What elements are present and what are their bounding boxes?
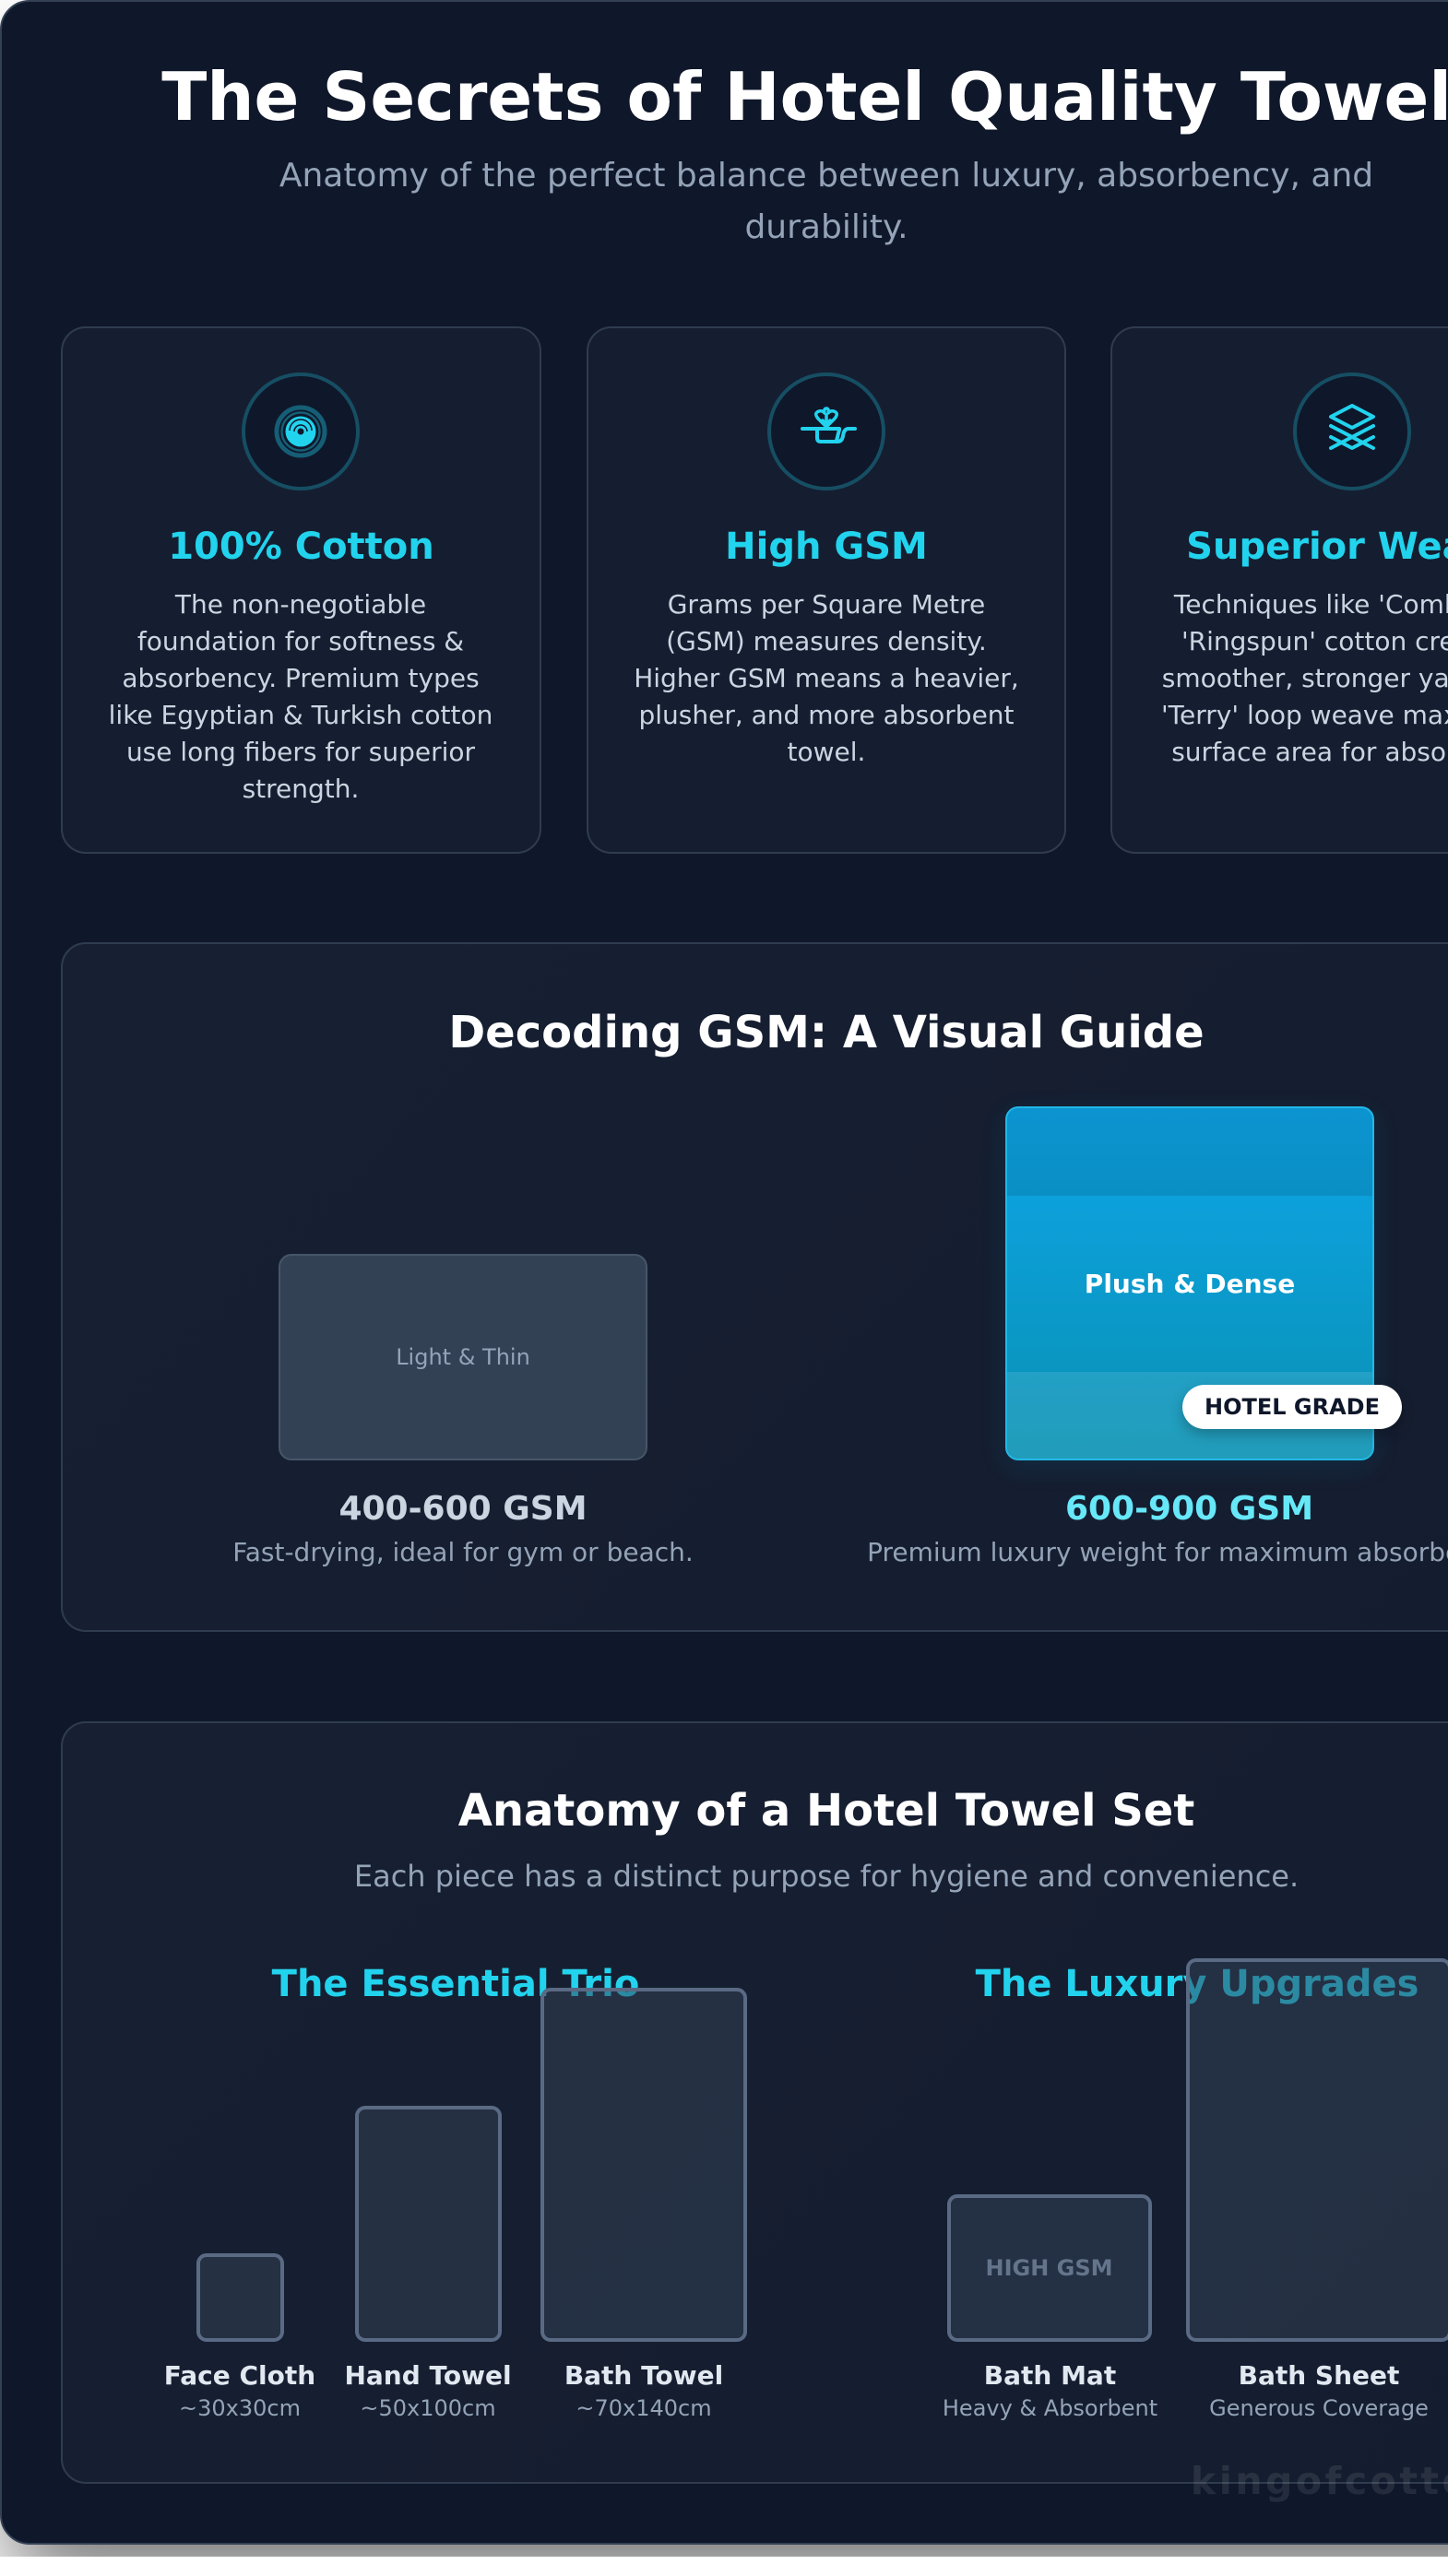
text: GSM description: Higher GSM means a heavier,	[634, 663, 1019, 693]
text: cotton description: strength.	[243, 774, 359, 804]
text: GSM description: Grams per Square Metre	[668, 589, 985, 620]
towel: hand towel	[354, 2106, 502, 2342]
label: 600-900 GSM: 600-900 GSM	[1065, 1490, 1313, 1527]
text: GSM description: (GSM) measures density.	[666, 626, 987, 656]
size: hand towel: ~50x100cm	[360, 2395, 496, 2421]
heading: anatomy: Anatomy of a Hotel Towel Set	[458, 1785, 1194, 1837]
text: cotton description: absorbency. Premium types	[122, 663, 480, 693]
text: GSM description	[634, 589, 1019, 767]
label: bath mat: Bath Mat	[984, 2360, 1116, 2391]
label: bath sheet: Bath Sheet	[1239, 2360, 1399, 2391]
text: cotton description: like Egyptian & Turkish cotton	[109, 700, 493, 730]
towel: plush and dense: Plush & Dense	[1085, 1269, 1295, 1299]
towel: face cloth	[196, 2253, 284, 2342]
heading: 100% cotton: 100% Cotton	[168, 526, 434, 568]
note: bath mat: Heavy & Absorbent	[943, 2395, 1157, 2421]
label: bath towel: Bath Towel	[564, 2360, 723, 2391]
towel: light and thin	[279, 1254, 647, 1460]
text: GSM description: towel.	[788, 737, 865, 767]
note: bath sheet: Generous Coverage	[1209, 2395, 1429, 2421]
text: anatomy subtitle: Each piece has a distinct purpose for hygiene and convenience.	[354, 1859, 1299, 1894]
panel: anatomy of a towel set	[61, 1721, 1448, 2484]
size: face cloth: ~30x30cm	[179, 2395, 301, 2421]
panel: high GSM card	[587, 326, 1066, 854]
text: 400-600 description: Fast-drying, ideal for gym or beach.	[232, 1536, 694, 1567]
badge: hotel grade	[1182, 1385, 1402, 1429]
heading: luxury upgrades: The Luxury Upgrades	[976, 1963, 1418, 2005]
icon: woven layers	[1293, 372, 1411, 490]
size: bath towel: ~70x140cm	[576, 2395, 712, 2421]
text: GSM description: plusher, and more absorbent	[638, 700, 1015, 730]
towel: bath mat: HIGH GSM	[985, 2255, 1113, 2281]
panel: decoding GSM	[61, 942, 1448, 1632]
heading: essential trio: The Essential Trio	[272, 1963, 639, 2005]
badge: hotel grade: HOTEL GRADE	[1205, 1394, 1380, 1420]
towel: bath mat	[946, 2194, 1151, 2342]
subtitle: durability.	[744, 208, 908, 245]
towel: plush and dense	[1005, 1106, 1374, 1460]
heading: decoding GSM: Decoding GSM: A Visual Guide	[448, 1007, 1205, 1058]
text: weave description	[1161, 589, 1448, 767]
subtitle: Anatomy of the perfect balance between luxury, absorbency, and	[279, 157, 1373, 195]
panel: 100% cotton card	[61, 326, 541, 854]
label: face cloth: Face Cloth	[164, 2360, 315, 2391]
text: cotton description	[109, 589, 493, 804]
icon: cotton fibre rings	[242, 372, 360, 490]
icon: pot with leaves	[767, 372, 885, 490]
subtitle	[279, 157, 1373, 245]
towel: bath towel	[540, 1988, 747, 2342]
towel: bath sheet	[1186, 1958, 1448, 2342]
label: 400-600 GSM: 400-600 GSM	[338, 1490, 588, 1527]
text: cotton description: The non-negotiable	[175, 589, 426, 620]
text: cotton description: foundation for softness &	[137, 626, 464, 656]
label: hand towel: Hand Towel	[344, 2360, 512, 2391]
panel: superior weave card	[1110, 326, 1448, 854]
towel: light and thin: Light & Thin	[396, 1344, 530, 1370]
heading: high GSM: High GSM	[725, 526, 928, 568]
text: cotton description: use long fibers for superior	[126, 737, 475, 767]
